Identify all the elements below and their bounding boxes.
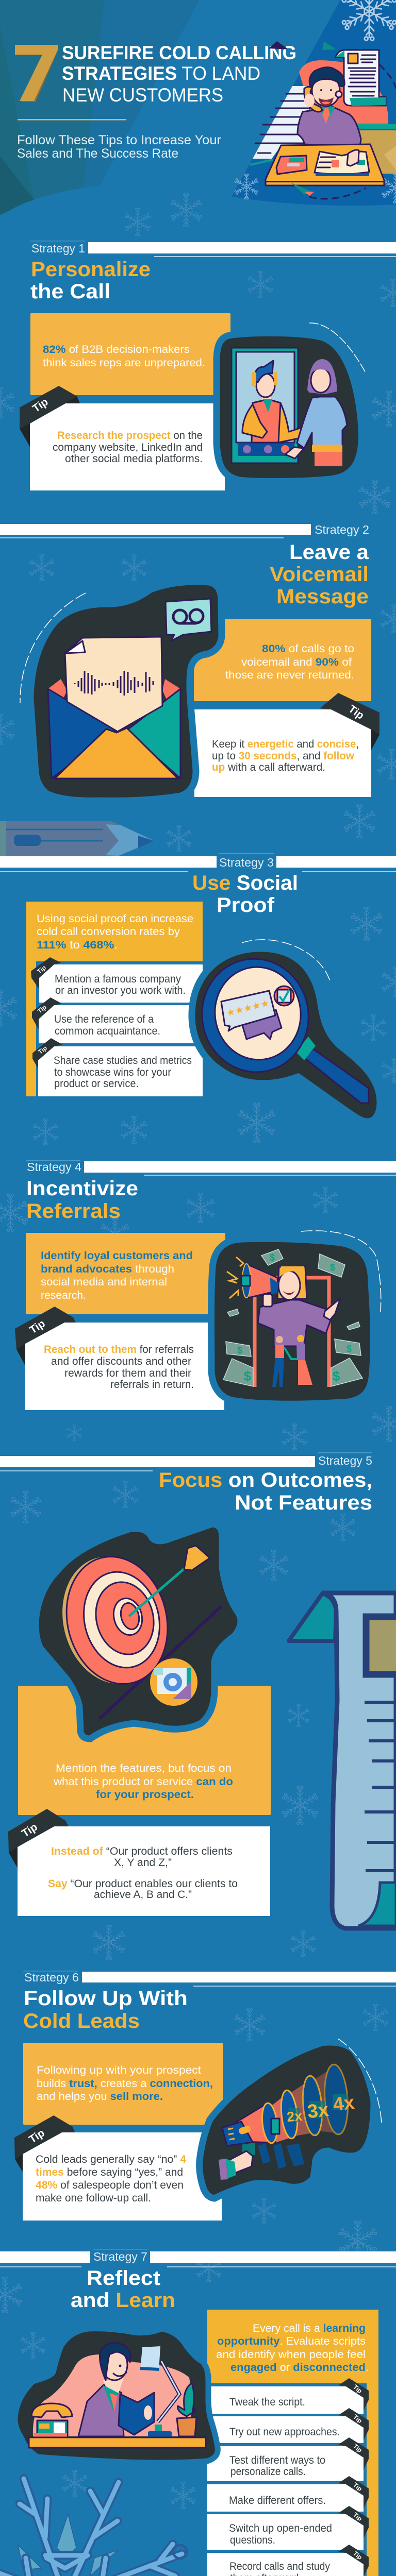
panel: strategy 6 stat: and helps you sell more. bbox=[37, 2091, 163, 2103]
illustration: woman with megaphone and money: $ bbox=[346, 1344, 352, 1354]
strategy 6 header: Follow Up With bbox=[24, 1987, 188, 2010]
title: STRATEGIES TO LAND bbox=[62, 63, 260, 84]
panel: strategy 2 stat: 80% of calls go to bbox=[262, 643, 354, 655]
panel: strategy 1 tip bbox=[20, 386, 225, 490]
title: NEW CUSTOMERS bbox=[62, 84, 223, 106]
paper sheet bbox=[335, 50, 386, 106]
tip card 3: to showcase wins for your bbox=[54, 1066, 171, 1078]
panel: strategy 5 tip: achieve A, B and C.” bbox=[94, 1889, 192, 1901]
tip card 2 bbox=[32, 997, 203, 1043]
panel: strategy 2 tip: up to 30 seconds, and follow bbox=[212, 750, 355, 762]
panel: strategy 3 tips bbox=[31, 957, 203, 1096]
panel: strategy 4 advice: social media and internal bbox=[41, 1276, 167, 1288]
tip card 1: Mention a famous company bbox=[55, 973, 181, 985]
subtitle bbox=[17, 133, 221, 161]
panel: strategy 4 advice: brand advocates through bbox=[41, 1263, 174, 1275]
tip ribbon: Tip bbox=[27, 1317, 47, 1336]
strategy 1 header bbox=[30, 241, 396, 303]
strategy 1 header: the Call bbox=[30, 280, 110, 303]
strategy 1 header: Strategy 1 bbox=[31, 242, 85, 255]
man bbox=[298, 67, 361, 151]
strategy 5 header bbox=[0, 1452, 372, 1514]
strategy 3 header: Use Social bbox=[192, 872, 298, 894]
tip card 3: product or service. bbox=[54, 1078, 139, 1090]
review card with stars: ★★★★★ bbox=[225, 998, 271, 1019]
panel: strategy 4 tip: referrals in return. bbox=[110, 1379, 194, 1391]
tip card 6 bbox=[207, 2553, 364, 2576]
strategy 2 header: Leave a bbox=[289, 541, 369, 564]
panel: strategy 4 advice bbox=[26, 1233, 225, 1314]
review card with stars bbox=[221, 991, 275, 1031]
strategy 5 header: Not Features bbox=[235, 1492, 372, 1514]
illustration: target and arrow bbox=[36, 1524, 241, 1739]
tip card 2 bbox=[207, 2416, 364, 2443]
strategy 2 header: Message bbox=[276, 585, 369, 608]
tip card 2: common acquaintance. bbox=[55, 1025, 160, 1037]
audio note paper bbox=[65, 637, 162, 732]
strategy 1 header: Personalize bbox=[31, 258, 151, 281]
panel: strategy 7 stat: Every call is a learning bbox=[253, 2323, 366, 2334]
panel: strategy 6 tip: Cold leads generally say “no” 4 bbox=[36, 2154, 186, 2165]
panel: strategy 6 tip: 48% of salespeople don’t even bbox=[36, 2179, 184, 2191]
panel: strategy 2 stat: voicemail and 90% of bbox=[241, 656, 352, 668]
strategy 2 header: Voicemail bbox=[270, 563, 369, 586]
panel: strategy 5 advice bbox=[18, 1686, 271, 1815]
open book bbox=[119, 2393, 154, 2435]
panel: strategy 1 tip: other social media platforms. bbox=[65, 453, 203, 465]
tip card 2: Use the reference of a bbox=[54, 1013, 154, 1025]
strategy 4 header: Referrals bbox=[26, 1200, 121, 1223]
illustration: man reading at desk bbox=[15, 2329, 218, 2463]
strategy 2 header: Strategy 2 bbox=[315, 523, 369, 536]
panel: strategy 6 stat: builds trust, creates a connection, bbox=[37, 2078, 213, 2090]
panel: strategy 1 stat bbox=[30, 313, 230, 395]
tip ribbon bbox=[14, 2115, 75, 2172]
tip card 3: personalize calls. bbox=[230, 2466, 306, 2478]
small people shaking hands bbox=[272, 1335, 312, 1387]
panel: strategy 7 stat: opportunity. Evaluate scripts bbox=[217, 2335, 366, 2347]
man in the phone bbox=[242, 361, 302, 443]
illustration: giant paper scroll bbox=[289, 1593, 396, 1928]
tip card 5: questions. bbox=[230, 2534, 275, 2546]
panel: strategy 5 tip bbox=[8, 1809, 270, 1916]
hand holding megaphone bbox=[219, 2151, 253, 2180]
tip ribbons: Tip bbox=[352, 2550, 364, 2561]
strategy 7 header: and Learn bbox=[71, 2289, 175, 2312]
tip card 2: Try out new approaches. bbox=[229, 2426, 340, 2438]
panel: strategy 6 tip: times before saying “yes,” and bbox=[36, 2166, 183, 2178]
title: SUREFIRE COLD CALLING bbox=[62, 42, 296, 63]
panel: strategy 7 stat: engaged or disconnected . bbox=[230, 2362, 369, 2374]
tip ribbons: Tip bbox=[352, 2443, 364, 2454]
telephone and book bbox=[276, 150, 369, 176]
illustration: voicemail envelope bbox=[20, 582, 222, 801]
stack of papers bbox=[250, 86, 309, 166]
illustration: video call on phone bbox=[217, 323, 366, 481]
illustration: woman with megaphone and money: $ bbox=[244, 1368, 252, 1384]
desk surface bbox=[29, 2437, 206, 2448]
tip ribbon: Tip bbox=[30, 396, 51, 415]
megaphone handles bbox=[242, 2142, 304, 2169]
panel: strategy 3 stat: Using social proof can increase bbox=[37, 913, 193, 925]
panel: strategy 1 tip: company website, LinkedIn and bbox=[53, 442, 203, 453]
tip ribbons: Tip bbox=[352, 2413, 364, 2425]
paper planes and dashed trail bbox=[269, 41, 396, 199]
multiplier labels: 3x bbox=[306, 2099, 330, 2122]
illustration: magnifying glass with reviews bbox=[192, 940, 380, 1122]
tip card 1: Tweak the script. bbox=[229, 2396, 305, 2408]
tip card 4 bbox=[207, 2484, 364, 2512]
panel: strategy 2 tip bbox=[194, 693, 380, 797]
multiplier labels: 2x bbox=[286, 2108, 303, 2125]
tip ribbon bbox=[15, 1307, 76, 1366]
tip ribbon bbox=[320, 693, 380, 750]
panel: strategy 5 tip: Instead of “Our product offers clients bbox=[51, 1845, 233, 1857]
strategy 6 header: Cold Leads bbox=[23, 2010, 140, 2032]
panel: strategy 6 stat: Following up with your prospect bbox=[37, 2064, 201, 2076]
panel: strategy 6 tip: make one follow-up call. bbox=[36, 2192, 151, 2204]
panel: strategy 2 stat bbox=[194, 619, 371, 701]
desk lamp bbox=[140, 2346, 179, 2437]
strategy 3 header bbox=[0, 853, 396, 917]
strategy 5 advice text bbox=[53, 1762, 233, 1801]
panel: strategy 7 stat: and identify when people feel bbox=[216, 2349, 366, 2361]
potted plant bbox=[177, 2383, 196, 2436]
strategy 5 advice text: for your prospect. bbox=[96, 1789, 194, 1801]
tip ribbons: Tip bbox=[352, 2511, 364, 2522]
panel: strategy 7 tips bbox=[207, 2378, 369, 2576]
panel: strategy 2 stat: those are never returned. bbox=[225, 669, 354, 681]
panel: strategy 1 tip: Research the prospect on the bbox=[57, 430, 203, 442]
woman bbox=[258, 1266, 340, 1346]
panel: strategy 7 stat bbox=[207, 2310, 378, 2576]
illustration: woman with megaphone and money: $ bbox=[237, 1345, 242, 1355]
panel: strategy 4 tip: rewards for them and their bbox=[64, 1367, 191, 1379]
tip card 5 bbox=[207, 2514, 364, 2550]
strategy 7 header bbox=[0, 2249, 396, 2312]
panel: strategy 4 advice: Identify loyal customers and bbox=[41, 1250, 193, 1262]
strategy 3 header: Strategy 3 bbox=[219, 856, 274, 869]
tip card 3 bbox=[207, 2446, 364, 2481]
panel: strategy 3 stat: 111% to 468% . bbox=[37, 939, 118, 951]
title bbox=[62, 42, 296, 106]
tip card 3: Share case studies and metrics bbox=[54, 1055, 192, 1066]
multiplier labels bbox=[286, 2092, 356, 2125]
tip card 1 bbox=[31, 957, 203, 1003]
panel: strategy 4 advice: research. bbox=[41, 1290, 86, 1301]
tip card 4: Make different offers. bbox=[229, 2495, 326, 2506]
illustration: woman with megaphone and money: $ bbox=[270, 1252, 275, 1263]
megaphone bbox=[227, 1257, 278, 1307]
tip ribbon: Tip bbox=[346, 703, 366, 722]
title number 7 bbox=[15, 45, 58, 102]
desk bbox=[266, 144, 384, 185]
strategy 4 header bbox=[26, 1160, 396, 1223]
panel: strategy 2 tip: up with a call afterward. bbox=[212, 761, 325, 773]
illustration: faded pencil bbox=[0, 821, 154, 856]
illustration: man on the phone at desk bbox=[232, 0, 396, 206]
tip ribbons: Tip bbox=[352, 2481, 364, 2493]
panel: strategy 1 stat: 82% of B2B decision-makers bbox=[43, 344, 190, 355]
illustration: growing megaphones bbox=[200, 2039, 382, 2198]
panel: strategy 5 tip: X, Y and Z,” bbox=[114, 1857, 172, 1869]
check badge bbox=[274, 986, 294, 1006]
panel: strategy 6 stat bbox=[23, 2043, 223, 2125]
tip card 1: Tip bbox=[36, 964, 47, 975]
tip card 2: Tip bbox=[36, 1004, 48, 1015]
arrow bbox=[129, 1546, 210, 1616]
panel: strategy 3 stat: cold call conversion rates by bbox=[37, 926, 180, 938]
strategy 3 header: Proof bbox=[217, 894, 275, 917]
strategy 5 advice text: Mention the features, but focus on bbox=[56, 1762, 232, 1774]
panel: strategy 2 tip: Keep it energetic and concise, bbox=[212, 738, 359, 750]
strategy 6 header bbox=[23, 1971, 396, 2032]
tip ribbon: Tip bbox=[20, 1821, 40, 1840]
tip card 3: Test different ways to bbox=[229, 2454, 325, 2466]
man reading bbox=[78, 2343, 131, 2436]
tip ribbons bbox=[338, 2378, 369, 2576]
strategy 5 advice text: what this product or service can do bbox=[53, 1776, 233, 1788]
tip ribbons: Tip bbox=[352, 2383, 364, 2395]
money bbox=[223, 1249, 362, 1386]
large snowflake bbox=[0, 2479, 187, 2576]
subtitle: Sales and The Success Rate bbox=[17, 146, 178, 161]
illustration: woman with megaphone and money: $ bbox=[333, 1368, 340, 1384]
strategy 4 header: Incentivize bbox=[26, 1177, 138, 1200]
panel: strategy 4 tip: Reach out to them for referrals bbox=[44, 1344, 194, 1355]
tip ribbon bbox=[8, 1809, 69, 1868]
panel: strategy 1 stat: think sales reps are unprepared. bbox=[43, 357, 205, 369]
strategy 7 header: Reflect bbox=[87, 2267, 160, 2290]
tan box bbox=[353, 124, 396, 174]
strategy 4 header: Strategy 4 bbox=[27, 1160, 81, 1174]
tip card 6: Record calls and study bbox=[229, 2561, 330, 2572]
megaphone cones bbox=[312, 2066, 336, 2133]
rotary telephone bbox=[31, 2403, 72, 2437]
purple comment bubble bbox=[242, 1010, 282, 1039]
tip ribbon: Tip bbox=[27, 2127, 47, 2146]
panel: strategy 6 tip bbox=[14, 2115, 222, 2221]
panel: strategy 4 tip: and offer discounts and other bbox=[51, 1355, 191, 1367]
tip card 1 bbox=[207, 2386, 364, 2414]
strategy 5 header: Strategy 5 bbox=[318, 1454, 372, 1467]
panel: strategy 5 tip: Say “Our product enables our clients to bbox=[48, 1878, 238, 1890]
icon: voicemail bubble bbox=[166, 599, 211, 641]
tip card 5: Switch up open-ended bbox=[229, 2522, 332, 2534]
illustration: woman with megaphone and money bbox=[211, 1231, 381, 1404]
strategy 7 header: Strategy 7 bbox=[93, 2250, 147, 2263]
strategy 6 header: Strategy 6 bbox=[24, 1971, 79, 1984]
multiplier labels: 4x bbox=[332, 2092, 356, 2115]
panel: strategy 3 stat bbox=[26, 902, 203, 1096]
subtitle: Follow These Tips to Increase Your bbox=[17, 133, 221, 147]
tip card 3 bbox=[32, 1038, 203, 1096]
woman bbox=[285, 359, 347, 466]
illustration: woman with megaphone and money: $ bbox=[330, 1262, 335, 1273]
tip card 3: Tip bbox=[37, 1044, 48, 1056]
icon: blueprint with gear bbox=[150, 1658, 197, 1706]
header panel bbox=[15, 0, 396, 206]
strategy 5 header: Focus on Outcomes, bbox=[159, 1469, 372, 1492]
tip card 1: or an investor you work with. bbox=[55, 985, 186, 996]
panel: strategy 4 tip bbox=[15, 1307, 224, 1410]
strategy 2 header bbox=[0, 523, 369, 608]
tip ribbon bbox=[20, 386, 80, 447]
coral sun shape bbox=[299, 60, 388, 124]
